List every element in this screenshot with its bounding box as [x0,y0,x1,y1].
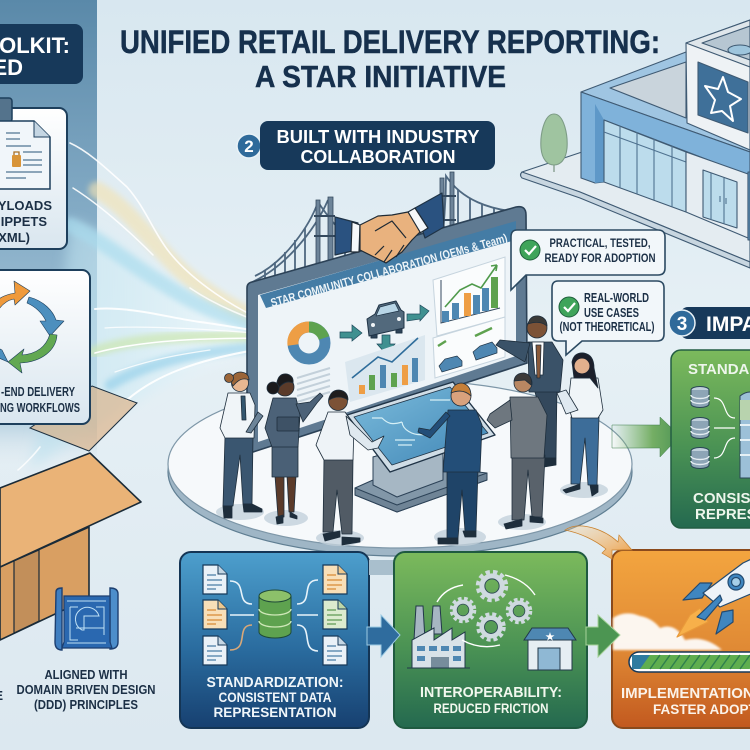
left toolkit column background [0,0,97,750]
person: woman in white shirt [220,372,263,518]
second line chart panel [345,335,425,402]
arrow: standardization to interoperability [367,615,400,657]
icon: car [367,301,404,338]
green arrow to standardized panel [612,417,680,457]
progress bar [629,652,750,672]
title [120,24,660,94]
entrance doors [703,170,737,228]
light beams flowing from toolkit to collaboration screen [18,143,290,470]
workflows text: -END DELIVERY [1,385,76,399]
speech bubble: real-world use cases: REAL-WORLD [584,291,649,305]
connector between panels [369,560,395,575]
title: A STAR INITIATIVE [255,59,506,94]
icon: gears [437,572,535,647]
icon: data flow into database [203,565,347,665]
payloads text [0,198,52,245]
icon: circular arrows [0,281,64,373]
standardization text: STANDARDIZATION: [206,675,344,691]
panel: standardization [180,552,369,728]
panel: standardization: REPRESENTATION [214,705,336,720]
person: woman in dark suit [265,374,323,524]
title: UNIFIED RETAIL DELIVERY REPORTING: [120,24,660,60]
arrow: interoperability to implementation [586,615,620,657]
step 3 badge and heading [669,307,750,339]
text: aligned with DDD principles: ALIGNED WITH [44,667,128,682]
flow arrows [340,305,429,354]
panel: standardization results [671,350,750,528]
step 2 badge and heading: COLLABORATION [300,147,456,167]
people around the table [220,316,603,545]
icon: star store: ★ [546,632,555,643]
collaboration dashboard screen [247,207,527,452]
donut chart [293,327,325,359]
small text lines under donut [297,368,330,402]
speech bubble: practical, tested [511,230,665,290]
car use-case panel [433,317,505,378]
bar chart panel [433,257,505,336]
person: man pointing at screen [496,316,563,467]
panel: interoperability: REDUCED FRICTION [434,701,548,716]
icon: source databases [691,386,735,468]
icon: rocket [677,555,750,637]
step 3 badge and heading: 3 [677,314,687,335]
panel: implementation [612,550,750,728]
text: aligned with DDD principles [0,667,156,712]
speech bubble: real-world use cases: (NOT THEORETICAL) [560,320,654,334]
panel: end-to-end workflows card [0,270,90,424]
workflows text [0,385,80,415]
icon: star [705,77,741,121]
speech bubble: real-world use cases [552,281,664,355]
text: aligned with DDD principles: (DDD) PRINCIPLES [34,697,138,712]
roof [581,30,750,152]
icon: handshake [335,193,444,263]
tower with star [686,20,750,150]
person: woman with tablet [557,353,603,496]
person: man in blue suit [418,383,482,544]
icon: smoke cloud [613,613,722,650]
panel: toolkit header [0,24,83,84]
icon: star store [524,628,576,670]
panel: standardization: CONSISTENT DATA [218,690,332,705]
screen title band: STAR COMMUNITY COLLABORATION (OEMs & Team) [269,231,509,310]
interoperability text: INTEROPERABILITY: [420,685,562,701]
icon: blueprint scroll [55,588,118,650]
icon: document with lock [0,121,50,189]
touch table [347,382,495,512]
person: man in grey suit [487,373,547,529]
workflows text: NG WORKFLOWS [0,401,80,415]
step 2 badge and heading: 2 [244,137,254,156]
person shadows [216,482,608,546]
panel: interoperability [394,552,587,728]
plaza [522,152,750,262]
fascia, pillar and glass front [581,92,750,183]
icon: tree [541,114,567,172]
person: man in white shirt [316,390,384,545]
panel: payloads and snippets card [0,98,67,249]
open box back flap [30,386,137,451]
bridge behind the screen [250,172,520,283]
platform [168,380,632,556]
open cardboard box [0,453,141,640]
step 2 badge and heading: BUILT WITH INDUSTRY [276,127,480,147]
speech bubble: practical, tested: PRACTICAL, TESTED, [550,236,650,250]
building illustration [520,20,750,268]
icon: factory [407,606,470,668]
orange swoosh arrow to implementation panel [565,526,632,559]
icon: unified database [740,392,750,478]
speech bubble: practical, tested: READY FOR ADOPTION [544,251,656,265]
text: aligned with DDD principles: DOMAIN BRIVEN DESIGN [16,682,156,697]
step 2 badge and heading [237,121,495,170]
speech bubble: real-world use cases: USE CASES [584,306,639,320]
